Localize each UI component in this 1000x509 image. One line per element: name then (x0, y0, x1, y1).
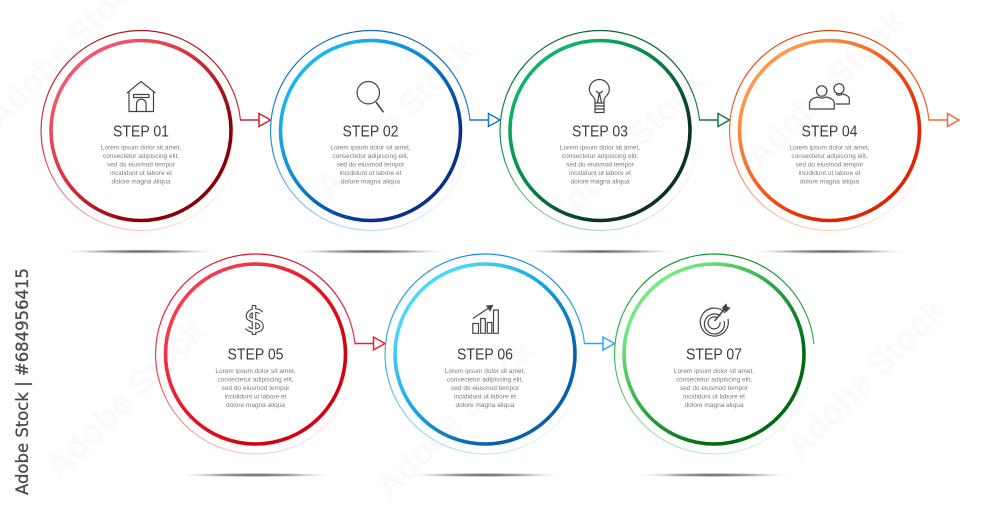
text: step 01: dolore magna aliqua (112, 178, 171, 186)
text: step 03: Lorem ipsum dolor sit amet, (560, 144, 640, 152)
text: step 05: sed do eiusmod tempor (222, 385, 290, 392)
text: step 07: incididunt ut labore et (683, 394, 745, 400)
panel: step 06 (385, 254, 614, 454)
text: step 01 (101, 144, 181, 186)
text: step 03: sed do eiusmod tempor (566, 162, 635, 168)
text: step 05: incididunt ut labore et (225, 394, 287, 400)
icon: people (810, 84, 849, 109)
arrow: step 04 out (928, 114, 959, 126)
text: step 02: incididunt ut labore et (340, 170, 402, 177)
text: step 07: consectetur adipiscing elit, (676, 376, 752, 384)
arrow: step 06 to 07 (584, 337, 614, 350)
text: step 04: consectetur adipiscing elit, (791, 153, 868, 160)
text: step 03: dolore magna aliqua (571, 178, 630, 186)
text: step 02: consectetur adipiscing elit, (332, 153, 409, 160)
text: step 04: dolore magna aliqua (800, 178, 859, 186)
panel: step 03 (500, 31, 730, 231)
shadow: step 05 (174, 473, 338, 477)
heading: step 01: STEP 01 (113, 124, 169, 140)
text: step 05: consectetur adipiscing elit, (217, 376, 294, 384)
text: step 03: incididunt ut labore et (569, 170, 631, 177)
text: step 01: Lorem ipsum dolor sit amet, (101, 144, 181, 152)
shadow: step 04 (748, 249, 912, 254)
heading: step 05: STEP 05 (228, 346, 284, 364)
text: step 02: sed do eiusmod tempor (337, 162, 405, 168)
shadow: step 06 (403, 473, 567, 477)
text: step 06: sed do eiusmod tempor (451, 385, 520, 392)
heading: step 02: STEP 02 (342, 124, 398, 140)
watermark: Adobe Stock (739, 2, 913, 176)
shadow: step 07 (632, 473, 796, 477)
watermark: Adobe Stock (309, 32, 483, 206)
panel: step 01 (41, 31, 271, 231)
text: step 06: dolore magna aliqua (456, 402, 515, 409)
panel: step 02 (271, 31, 500, 231)
shadow: step 03 (518, 249, 682, 254)
text: step 02: dolore magna aliqua (341, 178, 400, 186)
text: step 07: sed do eiusmod tempor (680, 385, 749, 392)
text: step 01: consectetur adipiscing elit, (103, 153, 179, 160)
heading: step 04: STEP 04 (802, 124, 858, 140)
watermark: Adobe Stock (539, 62, 713, 236)
text: step 06: consectetur adipiscing elit, (447, 376, 523, 384)
icon: dollar (247, 305, 262, 335)
heading: step 06: STEP 06 (457, 346, 513, 364)
text: step 07: Lorem ipsum dolor sit amet, (674, 368, 754, 375)
text: step 02 (330, 144, 411, 186)
arrow: step 02 to 03 (470, 114, 500, 126)
arrow: step 05 to 06 (354, 337, 385, 350)
icon: magnifier (357, 82, 384, 112)
watermark: Adobe Stock (39, 312, 213, 486)
text: step 04: sed do eiusmod tempor (796, 162, 864, 168)
stock credit: Adobe Stock | #684956415 (13, 268, 32, 495)
text: step 05: Lorem ipsum dolor sit amet, (215, 368, 296, 375)
arrow: step 01 to 02 (240, 114, 270, 126)
heading: step 03: STEP 03 (572, 124, 628, 140)
icon: bar chart (473, 306, 498, 333)
text: step 05 (215, 368, 296, 409)
text: step 06 (445, 368, 525, 409)
shadow: step 01 (59, 249, 223, 254)
watermark: Adobe Stock (779, 292, 953, 466)
watermark: Adobe Stock (369, 332, 543, 506)
panel: step 05 (156, 254, 385, 454)
arrow: step 03 to 04 (699, 114, 730, 126)
panel: step 07 (615, 254, 814, 454)
text: step 03 (560, 144, 640, 186)
text: step 03: consectetur adipiscing elit, (562, 153, 638, 160)
icon: target (700, 304, 730, 336)
text: step 02: Lorem ipsum dolor sit amet, (330, 144, 411, 152)
heading: step 07: STEP 07 (686, 346, 742, 364)
text: step 04: Lorem ipsum dolor sit amet, (789, 144, 870, 152)
text: step 01: incididunt ut labore et (110, 170, 172, 177)
text: step 04 (789, 144, 870, 186)
text: step 05: dolore magna aliqua (226, 402, 285, 409)
text: step 01: sed do eiusmod tempor (107, 162, 176, 168)
text: step 06: incididunt ut labore et (454, 394, 516, 400)
icon: light bulb (589, 80, 609, 112)
text: step 06: Lorem ipsum dolor sit amet, (445, 368, 525, 375)
icon: house (127, 82, 156, 112)
shadow: step 02 (288, 249, 452, 254)
text: step 07: dolore magna aliqua (685, 402, 744, 409)
text: step 07 (674, 368, 754, 409)
panel: step 04 (730, 31, 959, 231)
text: step 04: incididunt ut labore et (799, 170, 861, 177)
